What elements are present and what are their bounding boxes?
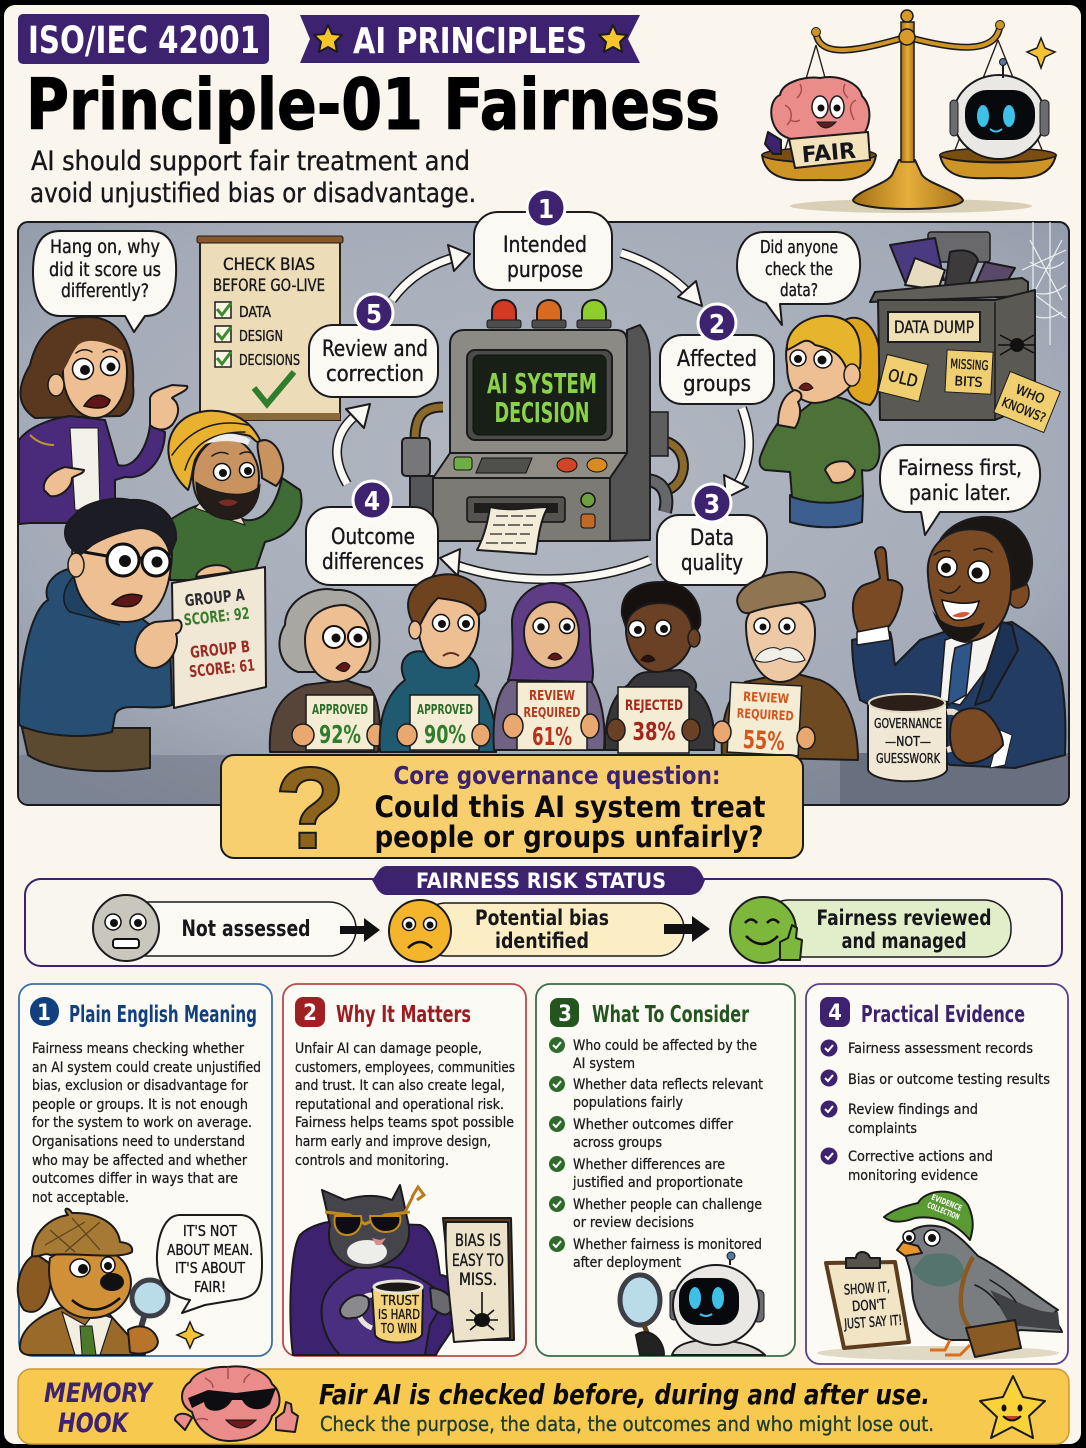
person 3: woman in hijab, review required 61%: REQUIRED [524,706,581,721]
character: blonde woman [760,316,880,527]
card 4 checklist [820,1040,1050,1184]
callout: core governance question: Could this AI system treat [374,790,766,824]
step 5: review and correction: Review and [322,337,428,362]
card 2: why it matters [283,984,526,1356]
number badge 4: 4 [828,1001,842,1026]
person 3: woman in hijab, review required 61% [494,583,604,751]
card 2 body: reputational and operational risk. [295,1097,504,1113]
card 1 body: people or groups. It is not enough [32,1097,248,1113]
character: man in suit with mug: GUESSWORK [876,752,940,767]
step 3: data quality [657,484,767,585]
poster: check bias before go-live: BEFORE GO-LIVE [213,276,325,296]
poster: check bias before go-live: DESIGN [239,327,283,345]
status: fairness reviewed and managed: and managed [842,929,966,953]
speech bubble: hang on [33,231,176,332]
card 3 checklist: Whether data reflects relevant [573,1077,763,1093]
card 4 checklist: Review findings and [848,1102,978,1118]
person 1: older woman, approved 92% [270,589,385,752]
character: cat in armchair with mug: IS HARD [378,1307,420,1323]
person 5: old man with cap, review required 55%: 55% [742,725,786,756]
status: potential bias identified: identified [495,929,589,953]
sign: bias is easy to miss: BIAS IS [455,1231,501,1251]
status: fairness reviewed and managed [730,897,1011,963]
character: robot with magnifier [620,1252,765,1355]
status: potential bias identified: Potential bias [475,906,609,930]
status: not assessed [93,895,356,961]
data dump bin with junk: KNOWS? [999,395,1048,426]
icon: scales with brain and robot: FAIR [801,139,857,168]
arrow [664,916,710,942]
step 5: review and correction: correction [326,362,424,387]
card 3 checklist [549,1037,763,1271]
step 1: intended purpose: purpose [507,258,583,283]
speech bubble: hang on: Hang on, why [50,237,160,258]
poster: check bias before go-live [197,236,343,420]
character: pigeon with clipboard: JUST SAY IT! [843,1313,903,1333]
character: man in suit with mug: GOVERNANCE [874,717,942,732]
person 4: boy, rejected 38%: REJECTED [625,698,683,714]
status: not assessed: Not assessed [182,917,310,942]
card 1 body: Fairness means checking whether [32,1041,245,1057]
data dump bin with junk: MISSING [950,357,989,374]
step 4: outcome differences: Outcome [331,525,415,550]
speech bubble: it's not about mean: ABOUT MEAN. [167,1241,253,1259]
card 1 body: not acceptable. [32,1190,129,1206]
card 1 body: bias, exclusion or disadvantage for [32,1078,249,1094]
card 3 heading: What To Consider [592,1002,750,1028]
step 1: intended purpose [474,189,612,290]
header ribbon: AI principles: AI PRINCIPLES [353,21,587,62]
status: potential bias identified [389,900,684,962]
character: pointing woman [19,317,187,524]
person 5: old man with cap, review required 55% [713,572,858,760]
step 4: outcome differences [306,481,438,585]
icon: brain in sunglasses [175,1366,298,1441]
step 2: affected groups [660,304,774,404]
number badge 1: 1 [37,1001,51,1026]
sign: bias is easy to miss [443,1218,514,1342]
icon: smiling star [980,1376,1045,1438]
card 2 heading: Why It Matters [336,1002,471,1028]
person 2: boy, approved 90% [380,574,496,752]
card 1 body: who may be affected and whether [32,1153,248,1169]
character: cat in armchair with mug: TO WIN [380,1321,417,1337]
speech bubble: did anyone check the data [737,232,860,325]
card 4 checklist: complaints [848,1121,917,1137]
person 3: woman in hijab, review required 61%: REVIEW [529,689,575,704]
character: pigeon with clipboard: COLLECTION [926,1201,961,1222]
speech bubble: fairness first [880,445,1040,535]
banner: memory hook [18,1366,1069,1444]
card 4 checklist: Corrective actions and [848,1149,993,1165]
card 2 body: and trust. It can also create legal, [295,1078,505,1094]
poster: check bias before go-live: DATA [239,303,272,321]
person 4: boy, rejected 38%: 38% [632,717,676,746]
status: fairness reviewed and managed: Fairness reviewed [816,906,992,930]
number badge 3 [550,998,579,1027]
character: cat in armchair with mug [290,1185,459,1355]
subtitle: avoid unjustified bias or disadvantage. [30,178,476,209]
card 2 body: Unfair AI can damage people, [295,1041,482,1057]
data dump bin with junk: BITS [954,374,983,391]
panel: fairness risk status [25,866,1062,966]
icon: scales with brain and robot [762,10,1056,213]
step 2: affected groups: groups [683,372,751,397]
machine: AI system decision: AI SYSTEM [487,367,597,400]
speech bubble: it's not about mean: FAIR! [194,1278,226,1296]
card 1 body: outcomes differ in ways that are [32,1171,238,1187]
character: man in suit with mug: —NOT— [885,735,931,750]
memory hook label: MEMORY [44,1378,154,1409]
person 2: boy, approved 90%: 90% [424,720,466,749]
character: man with glasses in hoodie [19,499,266,771]
flow arrows [337,245,749,579]
step 2: affected groups: 2 [709,310,725,340]
card 1 heading: Plain English Meaning [69,1002,257,1028]
step 1: intended purpose: Intended [503,233,587,258]
data dump bin with junk: WHO [1013,382,1047,408]
speech bubble: did anyone check the data: check the [765,260,833,280]
card 2 body: Fairness helps teams spot possible [295,1115,514,1131]
card 4 checklist: Fairness assessment records [848,1041,1033,1057]
callout: core governance question: Core governance question: [394,761,720,790]
card 3 checklist: populations fairly [573,1095,683,1111]
card 2 body [295,1041,515,1169]
person 2: boy, approved 90%: APPROVED [417,702,473,718]
card 3 checklist: Whether differences are [573,1157,725,1173]
step 3: data quality: 3 [704,490,720,520]
character: man with glasses in hoodie: SCORE: 61 [188,655,256,681]
card 1: plain English meaning [18,984,272,1356]
character: man in suit with mug [852,517,1066,781]
memory hook message: Check the purpose, the data, the outcomes and who might lose out. [320,1412,934,1436]
person 5: old man with cap, review required 55%: REQUIRED [736,707,794,725]
header badge: ISO/IEC 42001: ISO/IEC 42001 [28,19,260,62]
card 3: what to consider [536,984,795,1356]
card 1 body: Organisations need to understand [32,1134,245,1150]
step 3: data quality: quality [681,551,743,576]
speech bubble: hang on: differently? [61,281,149,302]
status heading [372,866,705,895]
header ribbon: AI principles [300,15,640,63]
callout: core governance question [221,743,803,873]
step 2: affected groups: Affected [677,347,757,372]
step 5: review and correction [309,294,438,397]
card 3 checklist: or review decisions [573,1215,694,1231]
character: man with glasses in hoodie: GROUP A [184,585,246,610]
panel: scene [18,222,1069,805]
character: pigeon with clipboard: EVIDENCE [930,1193,963,1213]
character: man with glasses in hoodie: SCORE: 92 [183,604,250,629]
character: pigeon with clipboard [817,1192,1062,1360]
table [840,753,1068,804]
title: Principle-01 Fairness [26,64,720,146]
step 4: outcome differences: 4 [364,487,380,517]
card 4 checklist: monitoring evidence [848,1168,978,1184]
subtitle [30,146,476,209]
data dump bin with junk [870,222,1066,433]
speech bubble: fairness first: panic later. [909,481,1011,506]
speech bubble: it's not about mean: IT'S ABOUT [175,1259,245,1277]
card 3 checklist: Whether people can challenge [573,1197,762,1213]
speech bubble: did anyone check the data: Did anyone [760,238,838,258]
card 1 body: for the system to work on average. [32,1115,252,1131]
number badge 2 [295,997,325,1027]
status heading: FAIRNESS RISK STATUS [416,869,666,894]
card 2 body: customers, employees, communities [295,1060,515,1076]
memory hook label [44,1378,154,1439]
person 5: old man with cap, review required 55%: REVIEW [743,690,789,707]
card 2 body: controls and monitoring. [295,1153,449,1169]
step 4: outcome differences: differences [322,550,424,575]
step 3: data quality: Data [690,526,734,551]
card 3 checklist: Who could be affected by the [573,1038,757,1054]
person 1: older woman, approved 92%: APPROVED [312,702,368,718]
machine: AI system decision: DECISION [494,396,590,429]
card 2 body: harm early and improve design, [295,1134,491,1150]
machine: AI system decision [402,300,683,554]
data dump bin with junk: DATA DUMP [894,318,974,338]
card 3 checklist: justified and proportionate [572,1175,743,1191]
person 3: woman in hijab, review required 61%: 61% [532,722,572,751]
speech bubble: it's not about mean: IT'S NOT [183,1222,237,1240]
speech bubble: fairness first: Fairness first, [898,456,1022,481]
step 1: intended purpose: 1 [538,195,554,225]
number badge 1 [30,997,59,1026]
card 3 checklist: Whether outcomes differ [573,1117,734,1133]
person 1: older woman, approved 92%: 92% [319,720,361,749]
speech bubble: it's not about mean [157,1215,262,1313]
number badge 2: 2 [303,1001,317,1026]
number badge 3: 3 [558,1002,572,1027]
callout: core governance question: ? [275,743,345,873]
poster: check bias before go-live: CHECK BIAS [223,255,315,275]
arrow [340,918,380,942]
person 4: boy, rejected 38% [605,582,714,753]
character: worried man in turban [168,411,302,580]
subtitle: AI should support fair treatment and [31,146,470,177]
card 4: practical evidence [806,984,1068,1364]
memory hook label: HOOK [58,1408,130,1439]
card 3 checklist: after deployment [573,1255,681,1271]
card 1 body [32,1041,261,1206]
card 1 body: an AI system could create unjustified [32,1060,261,1076]
character: pigeon with clipboard: DON'T [852,1297,887,1315]
card 4 heading: Practical Evidence [861,1002,1025,1028]
poster: check bias before go-live: DECISIONS [239,351,300,369]
card 3 checklist: Whether fairness is monitored [573,1237,762,1253]
step 5: review and correction: 5 [366,300,382,330]
card 3 checklist: AI system [573,1056,635,1072]
number badge 4 [820,997,850,1027]
data dump bin with junk: OLD [886,366,920,392]
speech bubble: did anyone check the data: data? [780,281,818,301]
sign: bias is easy to miss: EASY TO [452,1251,504,1271]
speech bubble: hang on: did it score us [49,260,161,281]
character: cat in armchair with mug: TRUST [380,1293,420,1309]
sign: bias is easy to miss: MISS. [459,1270,497,1290]
character: man with glasses in hoodie: GROUP B [189,637,251,662]
icon: sparkle [177,1322,203,1348]
memory hook message: Fair AI is checked before, during and after use. [319,1378,930,1411]
card 4 checklist: Bias or outcome testing results [848,1072,1050,1088]
card 3 checklist: across groups [573,1135,662,1151]
callout: core governance question: people or groups unfairly? [374,820,764,854]
character: pigeon with clipboard: SHOW IT, [843,1279,890,1299]
character: detective dog [18,1209,168,1355]
memory hook message [319,1378,934,1436]
